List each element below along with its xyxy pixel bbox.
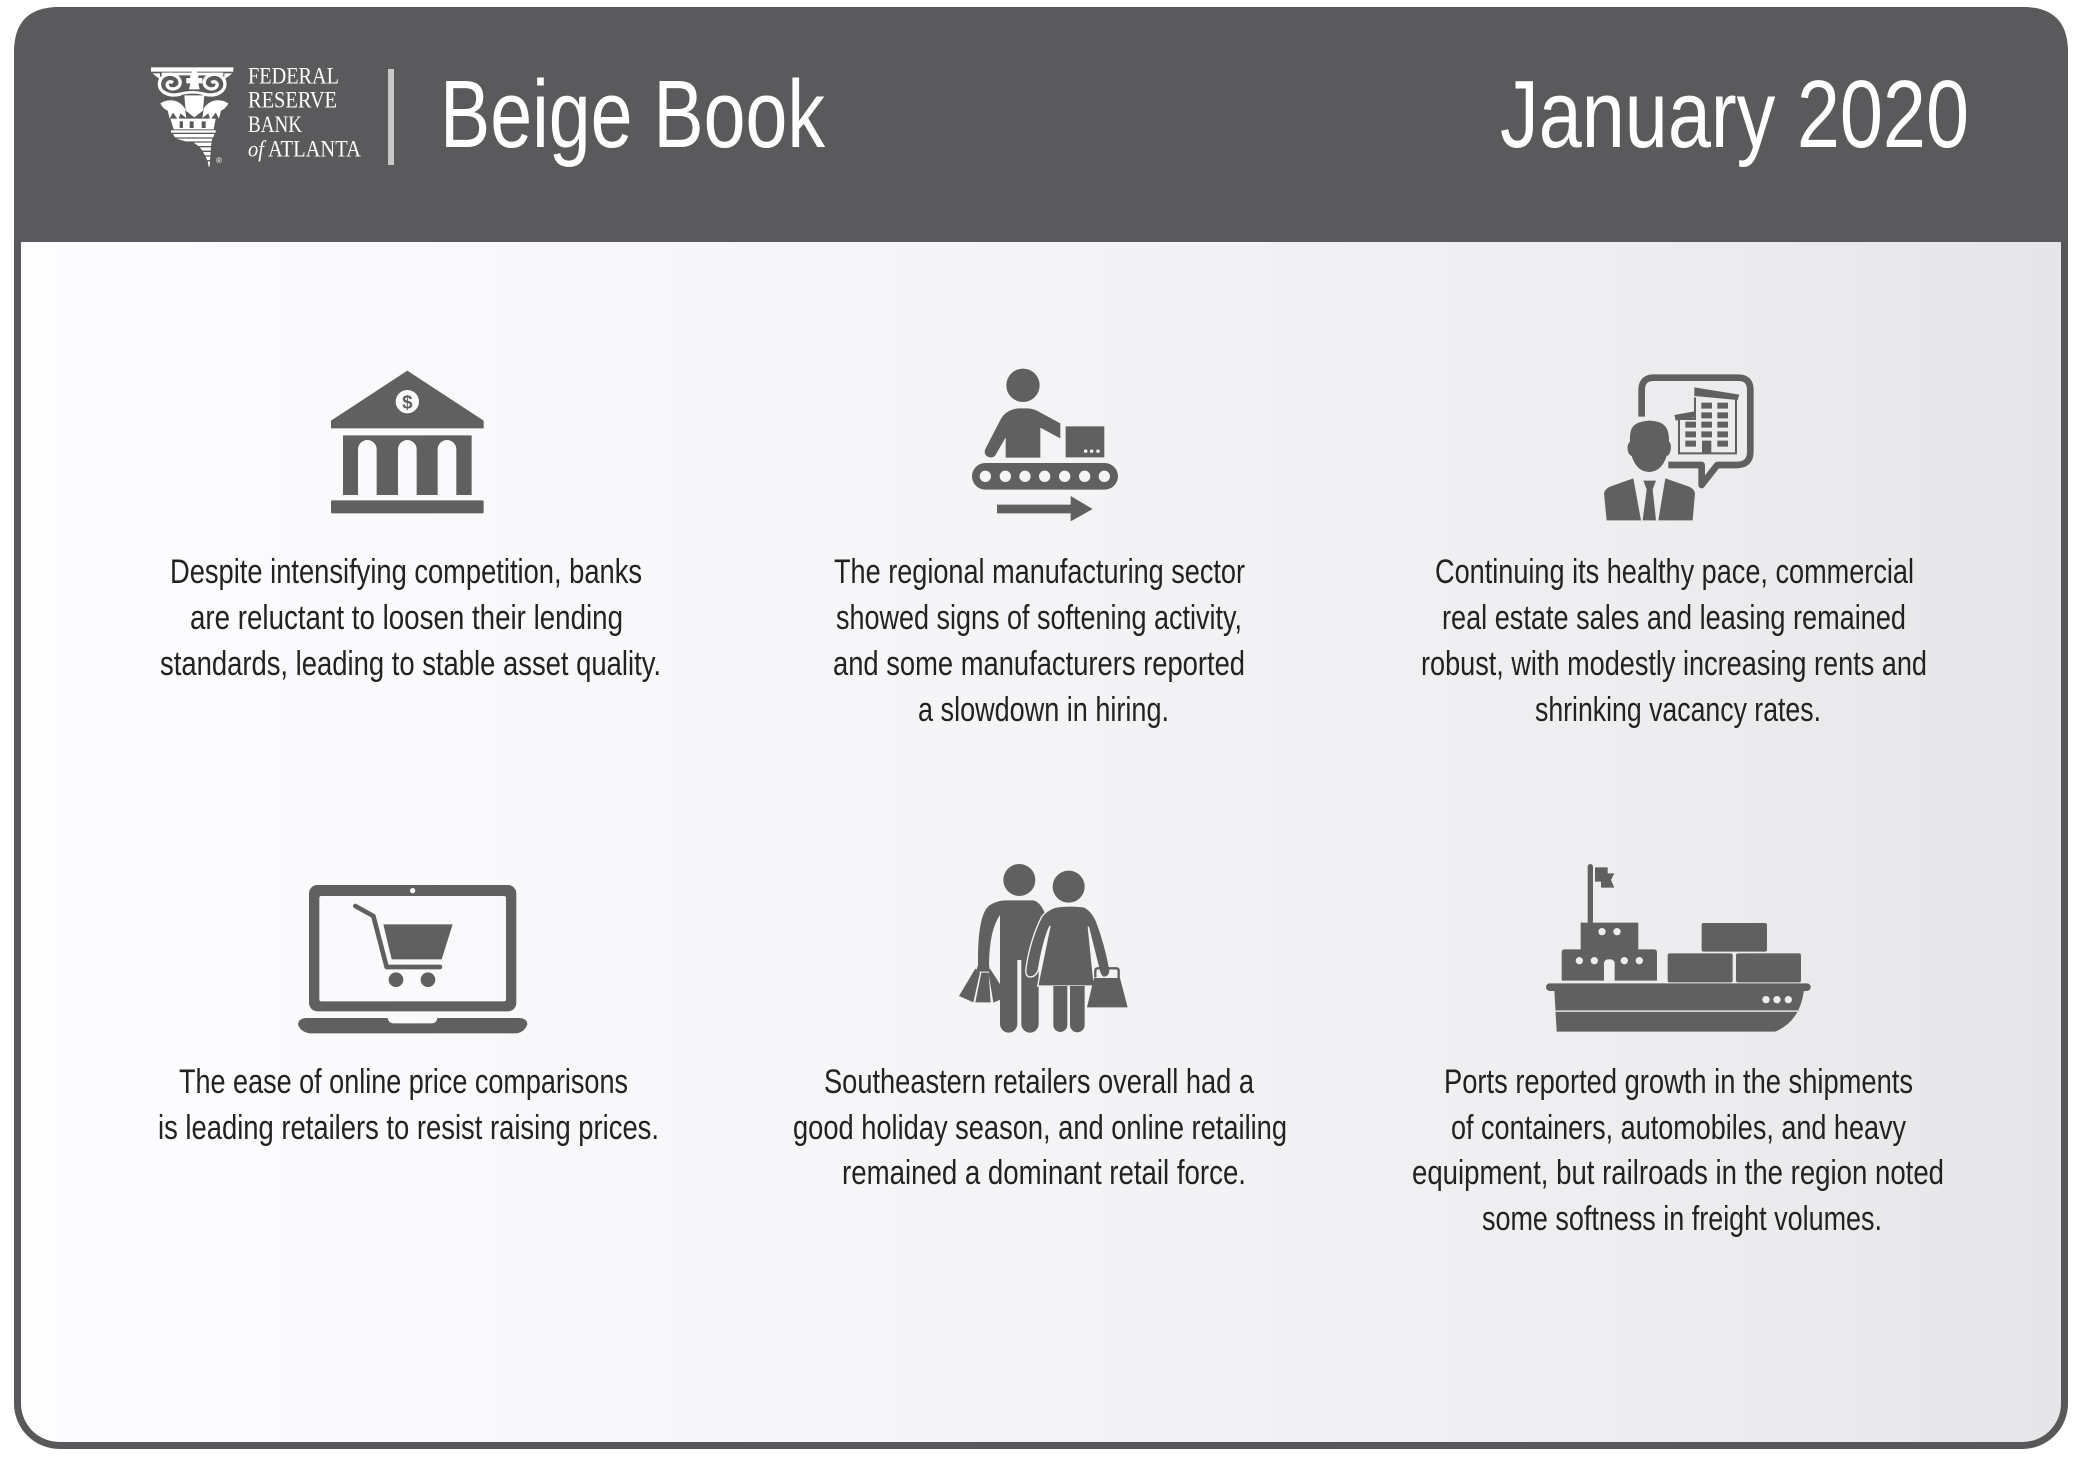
text: transportation: Ports reported growth in the shipments — [1444, 1063, 1913, 1101]
text: banking — [160, 553, 661, 683]
panel: commercial real estate — [1421, 378, 1927, 729]
logo: Federal Reserve Bank of Atlanta — [151, 64, 361, 167]
text: commercial real estate — [1421, 553, 1927, 729]
logo emblem — [151, 67, 233, 167]
text: transportation: equipment, but railroads in the region noted — [1412, 1154, 1944, 1192]
logo registered mark: ® — [216, 156, 222, 165]
icon: bank: $ — [402, 391, 413, 412]
logo wordmark — [248, 64, 361, 162]
text: retail: Southeastern retailers overall had a — [824, 1063, 1254, 1101]
title: Beige Book — [440, 61, 826, 168]
icon: businessman with building speech bubble — [1604, 378, 1750, 520]
text: transportation: of containers, automobiles, and heavy — [1451, 1109, 1906, 1147]
logo wordmark: FEDERAL — [248, 64, 339, 88]
text: manufacturing — [833, 553, 1245, 729]
icon: container ship — [1546, 864, 1811, 1032]
panel: retail — [793, 864, 1287, 1192]
text: commercial real estate: Continuing its healthy pace, commercial — [1435, 553, 1914, 591]
text: manufacturing: and some manufacturers reported — [833, 645, 1245, 683]
icon: bank — [331, 371, 484, 513]
icon: laptop with shopping cart — [298, 885, 527, 1033]
date: January 2020 — [1500, 61, 1969, 168]
text: online prices: The ease of online price comparisons — [179, 1063, 628, 1101]
text: banking: are reluctant to loosen their lending — [190, 599, 623, 637]
text: manufacturing: The regional manufacturing sector — [834, 553, 1245, 591]
panel: banking — [160, 371, 661, 683]
panel: manufacturing — [833, 369, 1245, 729]
header divider — [388, 69, 394, 165]
text: commercial real estate: real estate sales and leasing remained — [1442, 599, 1906, 637]
text: commercial real estate: robust, with modestly increasing rents and — [1421, 645, 1927, 683]
panel: online prices — [158, 885, 659, 1147]
text: manufacturing: a slowdown in hiring. — [918, 691, 1169, 729]
text: manufacturing: showed signs of softening activity, — [836, 599, 1242, 637]
icon: conveyor worker — [972, 369, 1118, 521]
logo wordmark: of ATLANTA — [248, 136, 361, 162]
text: banking: standards, leading to stable asset quality. — [160, 645, 661, 683]
logo wordmark: BANK — [248, 112, 302, 137]
text: retail: good holiday season, and online retailing — [793, 1109, 1287, 1147]
text: banking: Despite intensifying competition, banks — [170, 553, 642, 591]
header band — [14, 7, 2068, 242]
text: online prices: is leading retailers to resist raising prices. — [158, 1109, 659, 1147]
text: transportation: some softness in freight volumes. — [1482, 1200, 1882, 1238]
panel: transportation — [1412, 864, 1944, 1238]
text: transportation — [1412, 1063, 1944, 1238]
icon: shoppers — [959, 864, 1128, 1033]
logo wordmark: RESERVE — [248, 88, 337, 112]
text: retail: remained a dominant retail force. — [842, 1154, 1246, 1192]
text: commercial real estate: shrinking vacancy rates. — [1535, 691, 1821, 729]
text: retail — [793, 1063, 1287, 1192]
text: online prices — [158, 1063, 659, 1147]
